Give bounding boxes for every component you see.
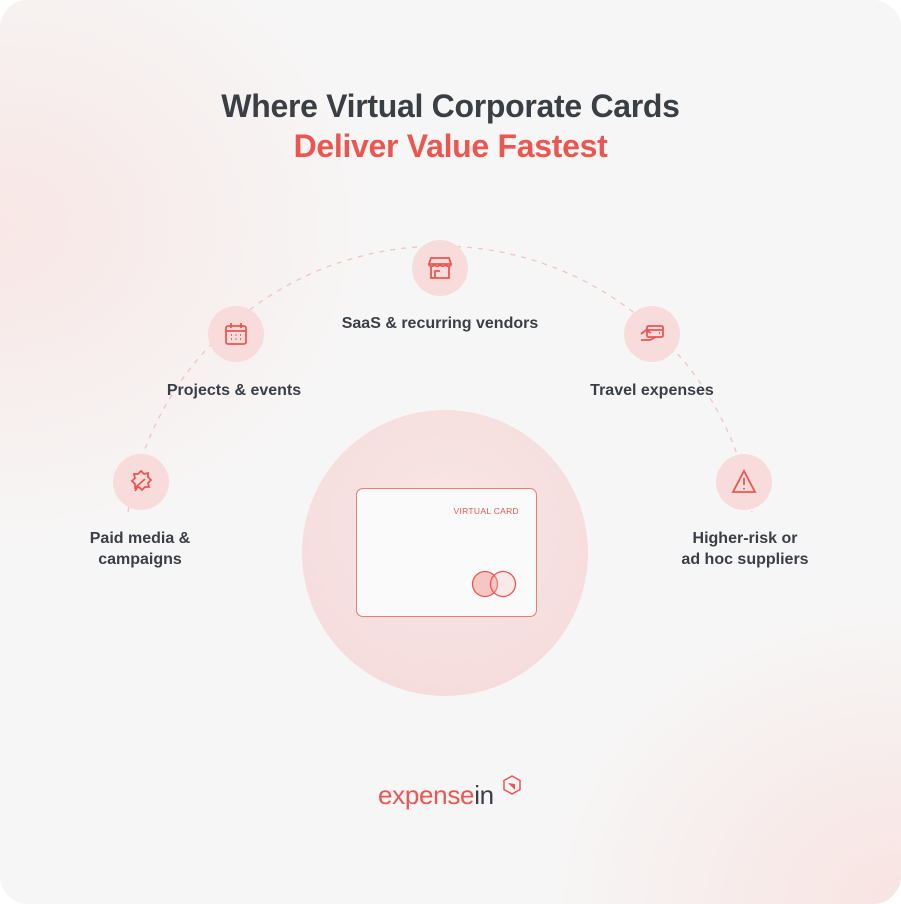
icon: warning: [716, 454, 772, 510]
label: paid media: Paid media &: [90, 530, 190, 547]
label: higher-risk: [681, 530, 809, 568]
label: paid media: [90, 530, 190, 568]
virtual card: VIRTUAL CARD: [454, 506, 519, 516]
label: higher-risk: ad hoc suppliers: [681, 551, 809, 568]
label: saas: SaaS & recurring vendors: [342, 315, 538, 332]
logo icon: [503, 775, 521, 795]
label: projects: Projects & events: [167, 382, 301, 399]
title: Where Virtual Corporate Cards: [221, 88, 680, 124]
logo: expensein: [378, 780, 494, 810]
icon: megaphone: [113, 454, 169, 510]
title: Deliver Value Fastest: [294, 128, 607, 164]
icon: card in hand: [624, 306, 680, 362]
label: paid media: campaigns: [98, 551, 182, 568]
title: [221, 88, 680, 164]
icon: calendar: [208, 306, 264, 362]
central circle: [302, 410, 588, 696]
virtual card: [356, 488, 537, 617]
icon: store: [412, 240, 468, 296]
label: travel: Travel expenses: [590, 382, 714, 399]
label: higher-risk: Higher-risk or: [693, 530, 797, 547]
